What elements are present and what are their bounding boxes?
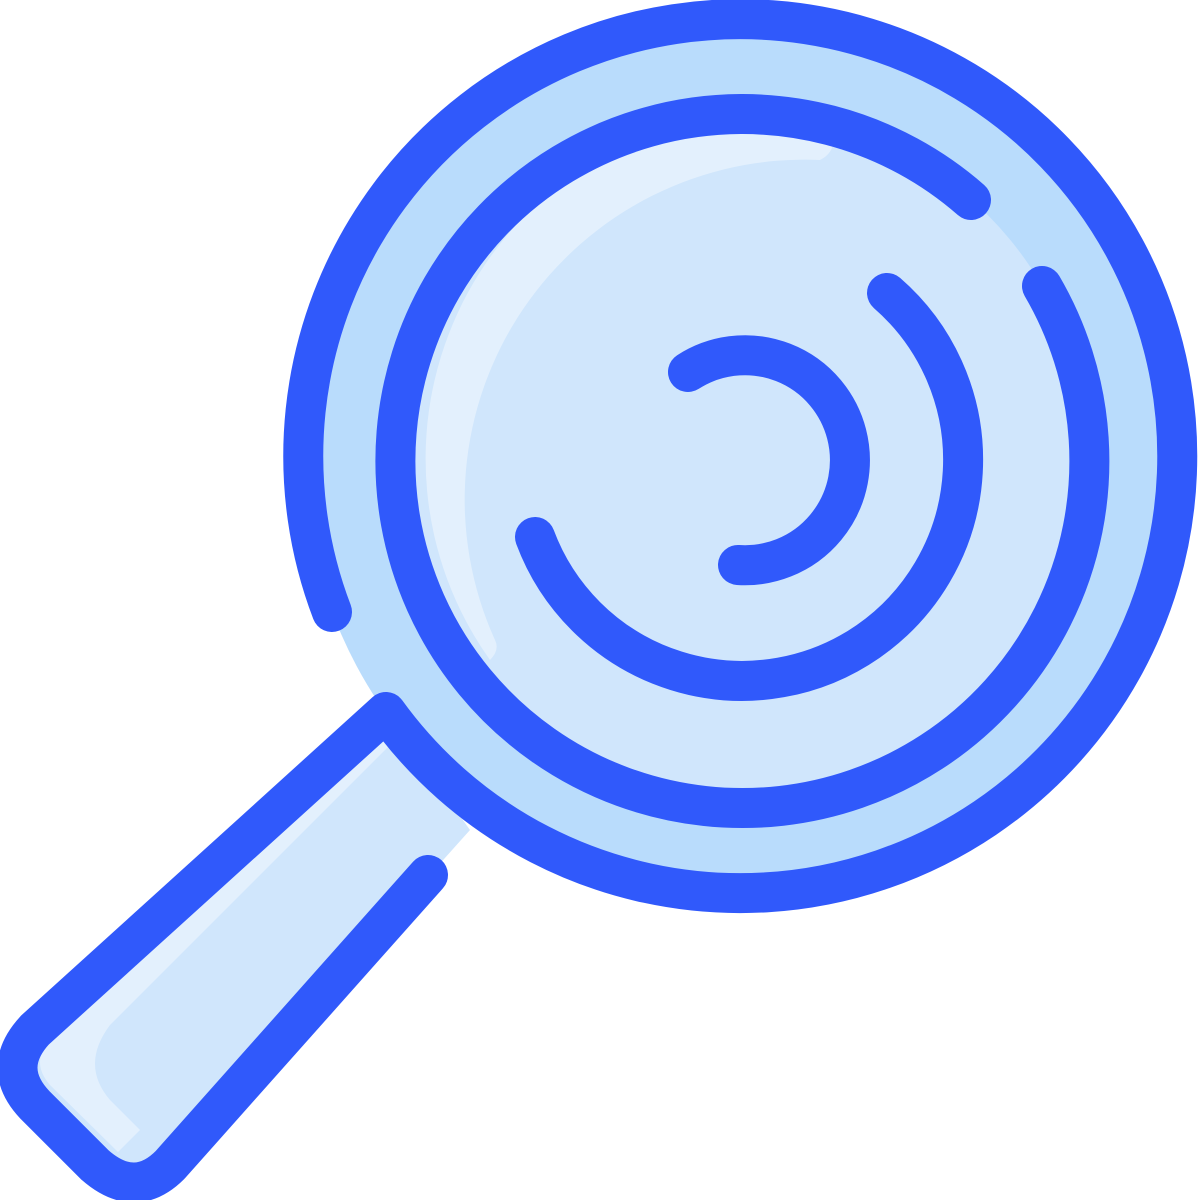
inner ring xyxy=(395,114,1089,808)
handle fill xyxy=(18,712,470,1182)
outer lens rim fill xyxy=(305,23,1179,897)
spiral large arc xyxy=(535,293,963,681)
inner lens xyxy=(395,113,1089,807)
spiral small arc xyxy=(688,355,850,565)
